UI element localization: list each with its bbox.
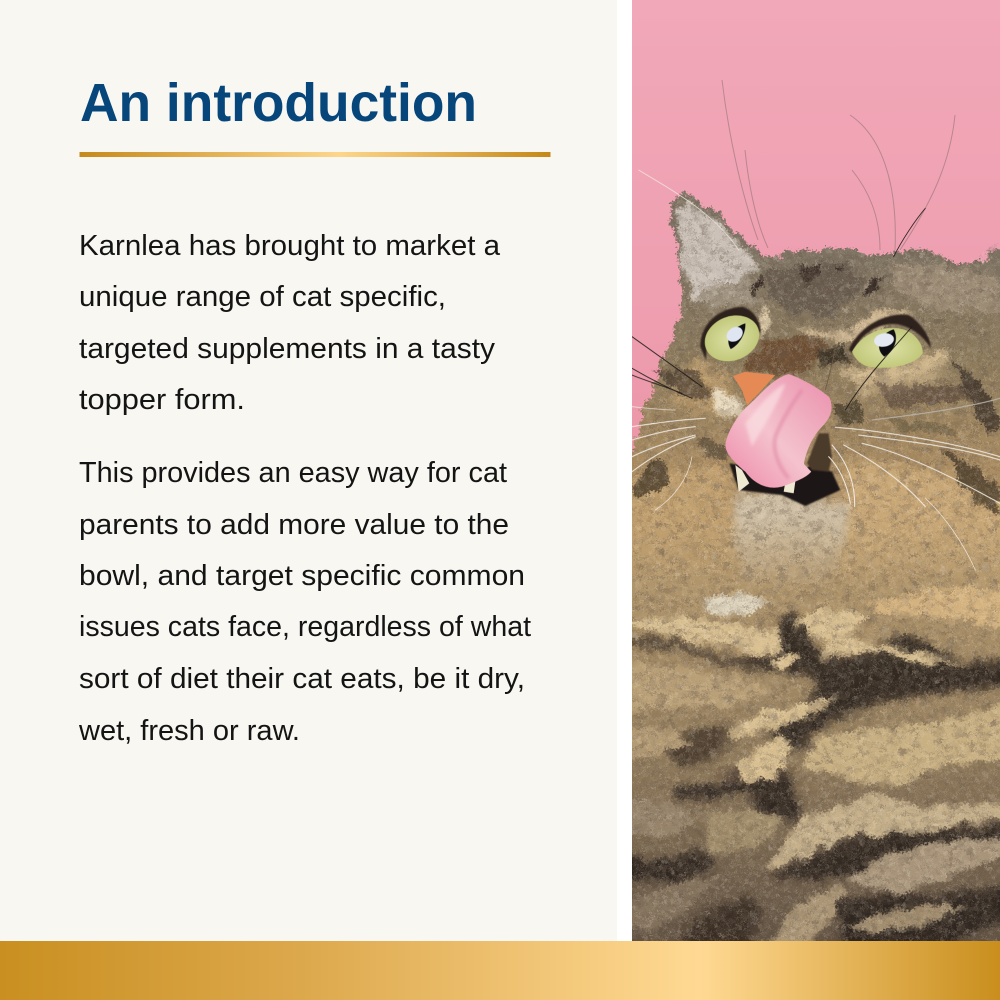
forehead and cheek stripes bbox=[632, 260, 1000, 517]
left pupil bbox=[728, 323, 745, 349]
paragraph one: Karnlea has brought to market a bbox=[79, 230, 500, 262]
paragraph two: parents to add more value to the bbox=[79, 509, 509, 541]
forehead mottling bbox=[699, 260, 1000, 317]
head and neck shape bbox=[632, 190, 1000, 504]
title: An introduction bbox=[80, 73, 477, 133]
cat fur body and head with furry edges bbox=[632, 190, 1000, 941]
right eye bbox=[852, 328, 923, 368]
tongue crease bbox=[774, 390, 802, 478]
pink backdrop bbox=[632, 0, 1000, 452]
gold gradient footer band bbox=[0, 941, 1000, 1000]
paragraph one: unique range of cat specific, bbox=[79, 281, 446, 313]
paragraph two bbox=[78, 457, 531, 747]
paragraph two: wet, fresh or raw. bbox=[78, 715, 300, 747]
chin bbox=[726, 490, 854, 583]
teeth bbox=[735, 465, 795, 493]
light fur tufts bbox=[632, 582, 1000, 941]
dark patch beside right eye bbox=[817, 343, 850, 367]
shadow right of the tongue bbox=[807, 433, 832, 472]
cat head fur bbox=[632, 190, 1000, 586]
tongue bbox=[725, 374, 832, 488]
paragraph two: sort of diet their cat eats, be it dry, bbox=[79, 663, 525, 695]
paragraph two: issues cats face, regardless of what bbox=[79, 611, 531, 643]
cat chest fur bbox=[632, 520, 1000, 941]
panel: text background bbox=[0, 0, 617, 941]
gold divider rule bbox=[80, 152, 550, 157]
bridge of the nose bbox=[742, 337, 825, 377]
paragraph one: topper form. bbox=[79, 384, 245, 416]
face whiskers bbox=[632, 170, 1000, 570]
paragraph two: bowl, and target specific common bbox=[79, 560, 525, 592]
dark fur shadows bbox=[632, 606, 1000, 941]
paragraph two: This provides an easy way for cat bbox=[79, 457, 507, 489]
nose bbox=[733, 372, 775, 405]
left eye bbox=[704, 315, 760, 362]
cheek and neck warm fur bbox=[632, 347, 1000, 542]
paragraph one: targeted supplements in a tasty bbox=[79, 333, 496, 365]
eye shadow sockets bbox=[700, 307, 931, 360]
stray long whiskers over the backdrop bbox=[722, 80, 955, 250]
brow highlights bbox=[712, 303, 949, 415]
ear inner bbox=[677, 202, 760, 303]
photo: tabby cat licking its nose on pink background bbox=[632, 0, 1000, 941]
dark whiskers bbox=[632, 208, 925, 410]
tongue highlight bbox=[745, 383, 785, 447]
cat face features bbox=[632, 170, 1000, 570]
mouth bbox=[729, 463, 840, 506]
fur texture overlay bbox=[632, 190, 1000, 941]
paragraph one bbox=[79, 230, 500, 416]
right pupil bbox=[879, 329, 896, 357]
text block: body copy bbox=[78, 230, 531, 747]
